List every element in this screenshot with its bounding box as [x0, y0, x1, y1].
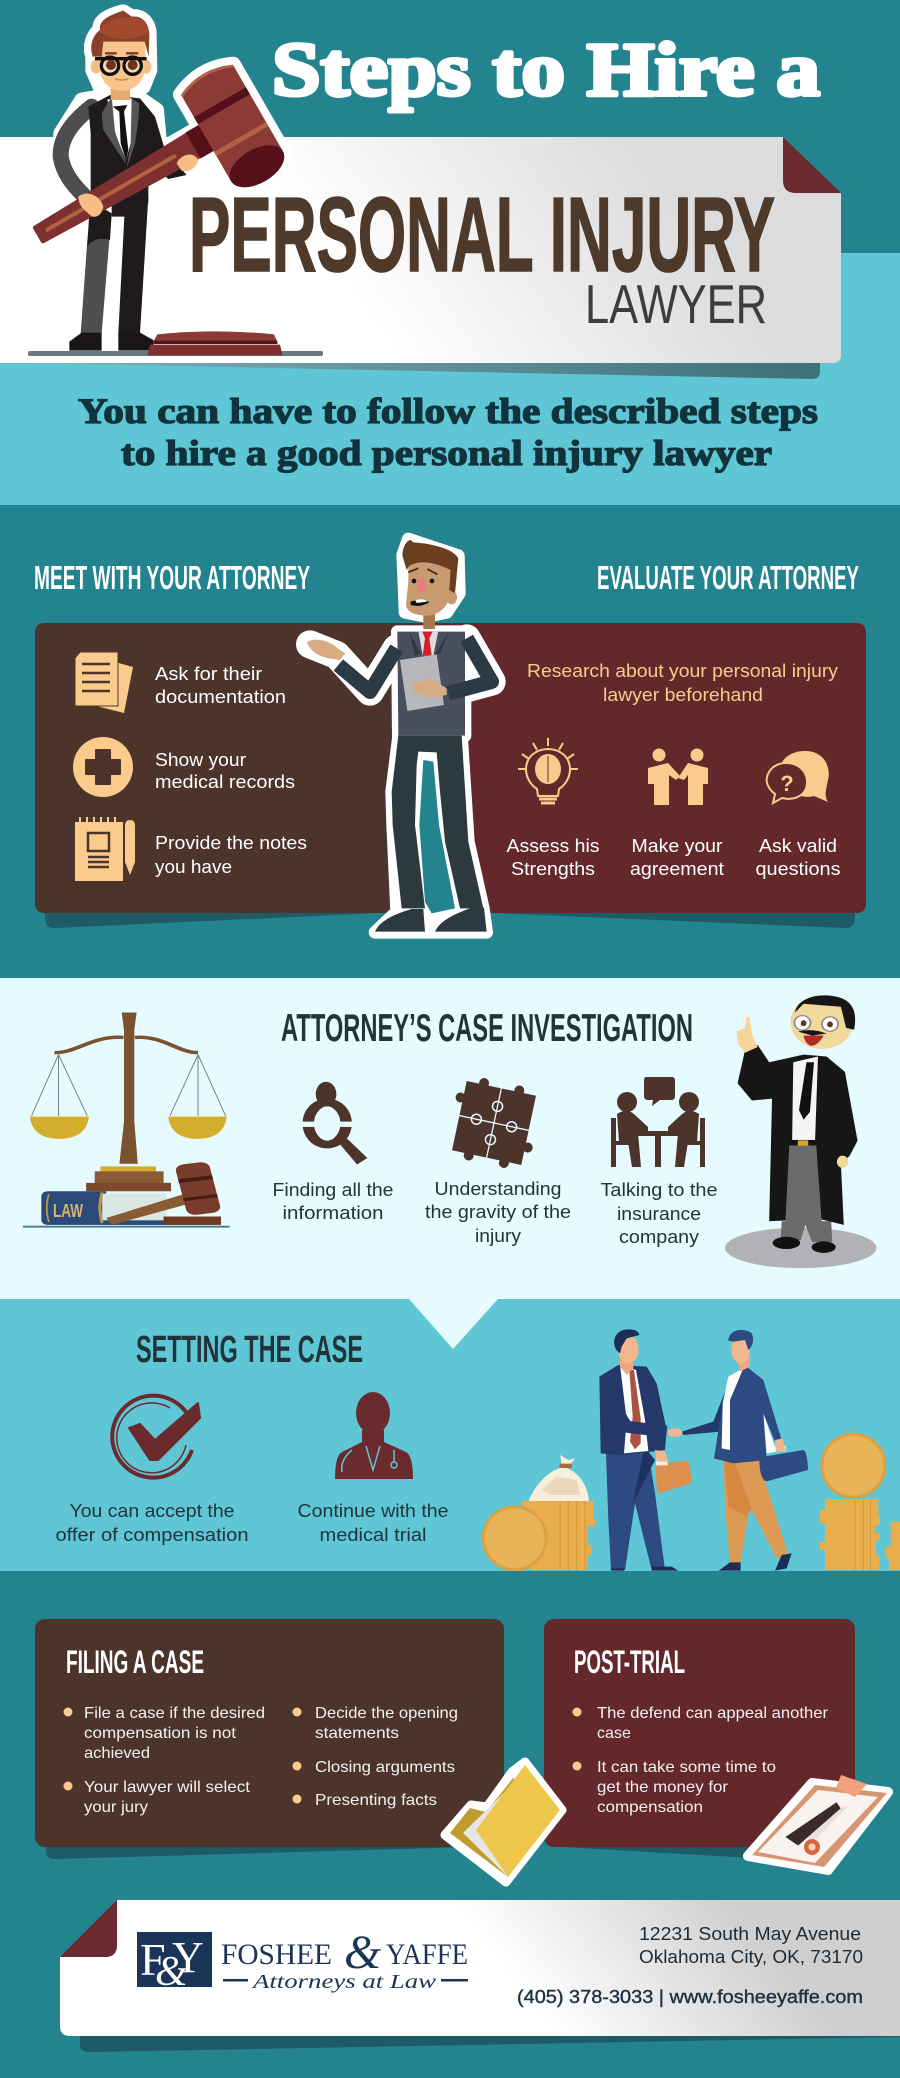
label: finding information: Finding all the: [272, 1179, 394, 1200]
ground line: [28, 351, 323, 356]
contact address: [639, 1924, 863, 1967]
trousers: [81, 197, 148, 333]
header background: [0, 0, 900, 505]
handshake: [668, 1428, 682, 1437]
right coin stack: [820, 1433, 900, 1570]
logo: foshee and yaffe: &: [155, 1949, 188, 1995]
logo: foshee and yaffe: FOSHEE: [221, 1938, 332, 1971]
man one jacket: [599, 1365, 667, 1455]
bullets: filing first column: your jury: [84, 1799, 148, 1816]
icon: notepad: [75, 817, 135, 881]
label: make agreement: [630, 835, 724, 879]
bullets: filing second column: [292, 1705, 458, 1809]
section: meet and evaluate background: [0, 505, 900, 978]
bullets: filing second column: Closing arguments: [315, 1759, 455, 1776]
head: [403, 540, 458, 629]
intro text: You can have to follow the described steps: [78, 391, 818, 431]
illustration: handshake and coins: [482, 1329, 900, 1571]
carrying hands: [655, 1438, 786, 1462]
contact address: Oklahoma City, OK, 73170: [639, 1947, 863, 1967]
icon: documents: [75, 652, 133, 713]
left coin stack: [482, 1501, 595, 1571]
heading: post-trial: POST-TRIAL: [574, 1644, 685, 1680]
panel shadows: [46, 1847, 790, 1860]
man two head: [728, 1330, 753, 1372]
footer banner with fold: [60, 1900, 900, 2036]
text: research: [527, 660, 839, 705]
notch arrow: [409, 1299, 498, 1349]
panel: post-trial: [544, 1619, 855, 1847]
text: documentation: [155, 663, 286, 707]
label: talking to insurance: [600, 1179, 718, 1247]
text: documentation: Ask for their: [155, 663, 262, 684]
logo: foshee and yaffe: &: [344, 1926, 382, 1979]
intro text: [78, 391, 818, 473]
bullets: filing second column: Decide the opening: [315, 1705, 458, 1722]
icon: puzzle: [443, 1073, 545, 1173]
icon: meeting at table: [611, 1077, 705, 1167]
label: medical trial: Continue with the: [298, 1500, 448, 1521]
man two briefcase: [759, 1447, 808, 1481]
panel shadows: [45, 913, 855, 928]
icon: medical cross: [73, 737, 133, 797]
gavel outline: [74, 59, 285, 246]
man one orange briefcase: [656, 1459, 692, 1493]
label: talking to insurance: company: [619, 1226, 700, 1247]
bullets: filing first column: File a case if the desired: [84, 1705, 265, 1722]
far arm: [61, 107, 92, 195]
label: ask questions: questions: [756, 858, 840, 879]
label: talking to insurance: Talking to the: [600, 1179, 718, 1200]
illustration: scales of justice with book and gavel: [23, 1013, 230, 1228]
sticker: folder: [445, 1762, 562, 1882]
label: make agreement: Make your: [632, 835, 722, 856]
heading: meet with your attorney: MEET WITH YOUR ATTORNEY: [34, 559, 310, 596]
label: ask questions: Ask valid: [759, 835, 837, 856]
label: finding information: information: [282, 1202, 384, 1223]
gavel: [9, 59, 291, 294]
arms: [338, 638, 492, 693]
label: medical trial: [298, 1500, 448, 1545]
bullets: post-trial: case: [597, 1725, 631, 1742]
contact address: 12231 South May Avenue: [639, 1924, 861, 1944]
icon: question bubbles: [767, 751, 829, 803]
clipboard: [400, 654, 444, 711]
bullets: filing first column: compensation is not: [84, 1725, 237, 1742]
shirt, tie and lapels: [409, 631, 449, 656]
man two jacket: [714, 1367, 782, 1463]
hand on handle: [78, 194, 103, 217]
man one shirt and tie: [620, 1365, 648, 1453]
text: medical records: medical records: [155, 771, 295, 792]
label: finding information: [272, 1179, 394, 1223]
label: talking to insurance: insurance: [617, 1203, 701, 1224]
footer shadow: [80, 2036, 900, 2052]
label: assess strengths: Assess his: [506, 835, 600, 856]
panel: filing a case: [35, 1619, 504, 1847]
gavel block: [148, 331, 283, 355]
illustration: lawyer with gavel: [9, 11, 291, 355]
banner shadow: [30, 363, 820, 379]
section: case investigation background: [0, 978, 900, 1299]
jacket: [397, 632, 465, 736]
label: understanding gravity: injury: [475, 1225, 522, 1246]
money bag: [528, 1455, 589, 1502]
man one arm: [608, 1397, 667, 1432]
logo: foshee and yaffe: Attorneys at Law: [250, 1971, 437, 1993]
label: accept compensation: offer of compensation: [56, 1524, 249, 1545]
white outline: [61, 12, 160, 147]
man one head: [614, 1329, 639, 1375]
label: assess strengths: Strengths: [511, 858, 595, 879]
logo: foshee and yaffe: F: [140, 1934, 166, 1985]
shoes: [69, 333, 153, 351]
white outline: [310, 539, 492, 932]
heading: filing a case: FILING A CASE: [66, 1644, 204, 1680]
raised hand: [307, 640, 345, 660]
scale book label: LAW: [53, 1201, 83, 1221]
bullets: filing first column: achieved: [84, 1745, 150, 1762]
label: medical trial: medical trial: [320, 1524, 426, 1545]
label: accept compensation: You can accept the: [70, 1500, 234, 1521]
text: research: Research about your personal injury: [527, 660, 839, 681]
heading: setting the case: SETTING THE CASE: [136, 1329, 363, 1371]
icon: check in circle: [112, 1396, 200, 1478]
intro text: to hire a good personal injury lawyer: [121, 433, 772, 473]
text: medical records: Show your: [155, 749, 246, 770]
man two white lining: [763, 1413, 777, 1453]
icon: light bulb brain: [518, 738, 578, 803]
illustration: worried man with clipboard: [307, 539, 492, 932]
bullets: post-trial: The defend can appeal another: [597, 1705, 829, 1722]
text: documentation: documentation: [155, 686, 286, 707]
bullets: filing second column: statements: [315, 1725, 399, 1742]
panel: meet with your attorney: [35, 623, 410, 913]
shirt and tie: [102, 97, 139, 168]
jacket: [88, 95, 187, 203]
banner: white ribbon with fold: [0, 137, 841, 363]
man two arm: [682, 1383, 737, 1435]
hand upper: [177, 154, 198, 171]
label: understanding gravity: Understanding: [434, 1178, 562, 1199]
bullets: post-trial: [572, 1705, 829, 1816]
shoes: [375, 908, 487, 932]
man one trousers: [606, 1452, 678, 1571]
icon: question bubbles: ?: [780, 771, 794, 796]
man two shirt: [722, 1368, 743, 1450]
label: assess strengths: [506, 835, 600, 879]
icon: handshake people: [648, 748, 708, 805]
panel: evaluate your attorney: [410, 623, 866, 913]
bullets: post-trial: It can take some time to: [597, 1759, 776, 1776]
bullets: post-trial: compensation: [597, 1799, 703, 1816]
hand on clipboard: [412, 678, 447, 698]
illustration: attorney in robe: [725, 995, 876, 1268]
bullets: filing first column: [64, 1705, 265, 1816]
logo: foshee and yaffe: YAFFE: [386, 1938, 468, 1971]
icon: doctor silhouette: [335, 1392, 413, 1479]
title: lawyer: LAWYER: [585, 273, 767, 335]
section: filing and footer background: [0, 1571, 900, 2078]
label: understanding gravity: the gravity of the: [425, 1201, 571, 1222]
section: setting the case background: [0, 1299, 900, 1571]
text: notes: you have: [155, 856, 232, 877]
text: medical records: [155, 749, 295, 792]
label: understanding gravity: [425, 1178, 571, 1246]
bullets: post-trial: get the money for: [597, 1779, 729, 1796]
label: make agreement: agreement: [630, 858, 724, 879]
trousers: [392, 736, 483, 908]
contact phone and website: (405) 378-3033 | www.fosheeyaffe.com: [517, 1987, 863, 2007]
man two trousers: [719, 1450, 792, 1571]
sticker: clipboard: [748, 1775, 888, 1870]
label: ask questions: [756, 835, 840, 879]
title: steps to hire a: Steps to Hire a: [272, 28, 820, 112]
teal gap between legs: [419, 760, 455, 913]
label: accept compensation: [56, 1500, 249, 1545]
text: notes: Provide the notes: [155, 832, 307, 853]
logo: foshee and yaffe: [137, 1926, 468, 1995]
text: research: lawyer beforehand: [603, 684, 763, 705]
logo: foshee and yaffe: Y: [172, 1933, 204, 1982]
bullets: filing second column: Presenting facts: [315, 1792, 437, 1809]
icon: magnifier: [300, 1082, 367, 1164]
text: notes: [155, 832, 307, 877]
head: [91, 11, 151, 100]
bullets: filing first column: Your lawyer will select: [84, 1779, 251, 1796]
